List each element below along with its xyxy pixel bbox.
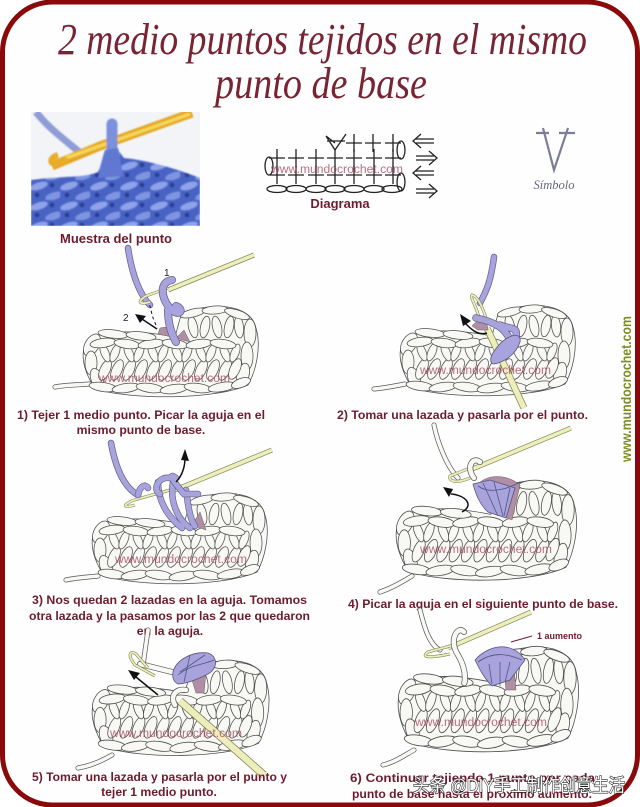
vertical website text: www.mundocrochet.com — [619, 316, 634, 463]
step 3 caption: 3) Nos quedan 2 lazadas en la aguja. Tomamos — [32, 593, 307, 607]
diagram caption: Diagrama — [310, 196, 370, 211]
step 1 watermark: www.mundocrochet.com — [98, 373, 230, 385]
crochet diagram — [265, 134, 437, 211]
number 2: 2 — [123, 313, 129, 324]
step 1 caption — [17, 408, 265, 437]
step 4 arrow — [451, 494, 468, 512]
step 6 caption: 6) Continuar tejiendo 1 punto por cada — [350, 771, 595, 785]
step 2 arrow — [465, 323, 487, 334]
increment label: 1 aumento — [537, 631, 583, 641]
step 5 caption: tejer 1 medio punto. — [101, 785, 217, 799]
diagram symbols — [265, 134, 405, 192]
step 5 illustration — [78, 630, 269, 775]
number 1: 1 — [164, 268, 170, 279]
step 3 arrow — [176, 458, 185, 482]
step 1 illustration — [55, 248, 258, 397]
step 4 caption: 4) Picar la aguja en el siguiente punto de base. — [348, 597, 618, 611]
step 1 caption: 1) Tejer 1 medio punto. Picar la aguja en el — [17, 408, 265, 422]
step 3 caption: otra lazada y la pasamos por las 2 que quedaron — [29, 609, 310, 623]
photo: stitch sample — [31, 112, 200, 226]
step 4 watermark: www.mundocrochet.com — [419, 544, 552, 556]
step 6 illustration — [383, 610, 583, 765]
step 5 arrow — [136, 677, 158, 695]
diagram watermark: www.mundocrochet.com — [270, 164, 403, 176]
step 5 caption — [32, 770, 287, 799]
step 3 caption — [29, 593, 310, 638]
symbol caption: Símbolo — [534, 178, 574, 192]
step 3 illustration — [66, 443, 272, 584]
arrow 2 — [142, 319, 157, 329]
step 3 watermark: www.mundocrochet.com — [114, 554, 247, 566]
step 2 caption: 2) Tomar una lazada y pasarla por el punto. — [337, 408, 588, 422]
step 1 caption: mismo punto de base. — [77, 423, 205, 437]
stitch symbol — [534, 128, 575, 192]
increment arrow — [511, 636, 532, 642]
step 6 caption — [350, 771, 595, 801]
step 5 caption: 5) Tomar una lazada y pasarla por el punto y — [32, 770, 287, 784]
diagram direction arrows — [413, 134, 437, 198]
step 4 illustration — [380, 425, 577, 592]
title — [58, 15, 587, 108]
title: punto de base — [212, 59, 427, 108]
step 5 watermark: www.mundocrochet.com — [109, 728, 242, 740]
step 2 illustration — [374, 257, 575, 408]
photo caption: Muestra del punto — [60, 231, 172, 246]
step 2 watermark: www.mundocrochet.com — [419, 365, 551, 377]
step 6 caption: punto de base hasta el próximo aumento. — [352, 787, 592, 801]
step 3 caption: en la aguja. — [137, 624, 203, 638]
step 6 watermark: www.mundocrochet.com — [414, 717, 547, 729]
